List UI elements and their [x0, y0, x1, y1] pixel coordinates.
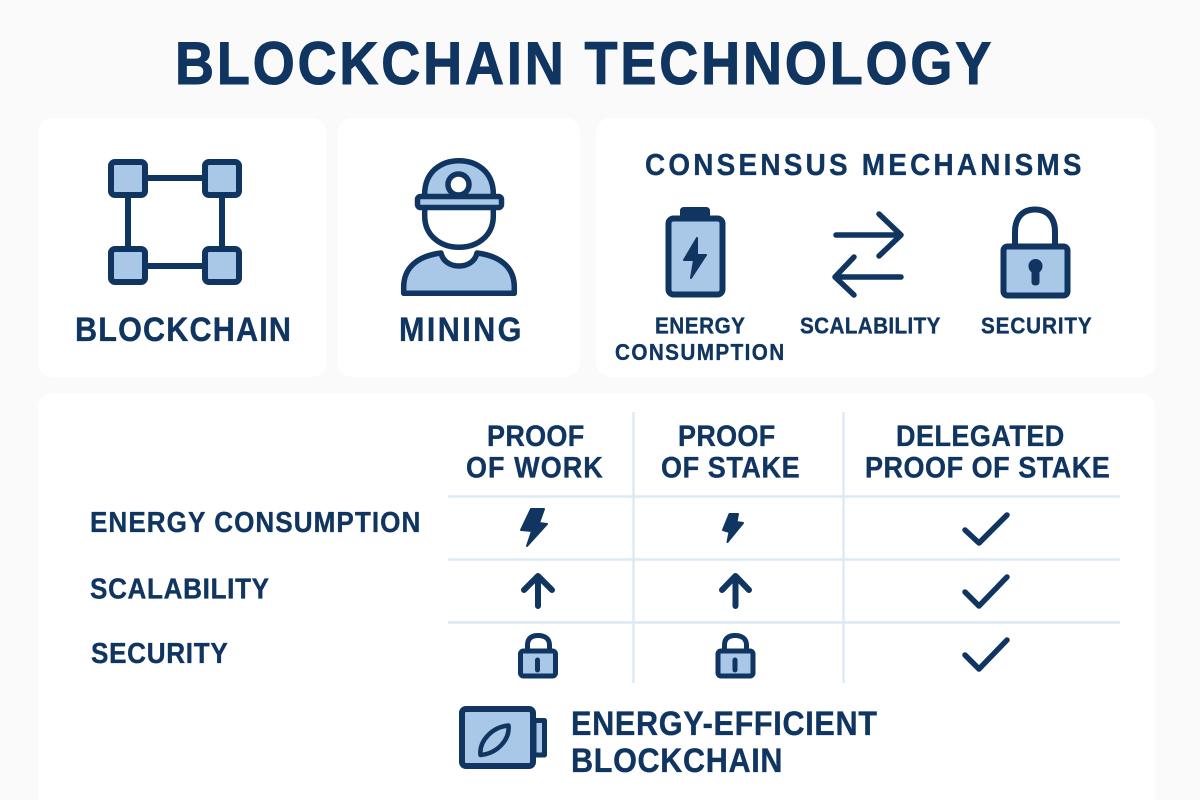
- label: mining: MINING: [399, 311, 521, 348]
- icon: connected blocks: [111, 162, 239, 282]
- heading: consensus mechanisms: CONSENSUS MECHANISMS: [645, 148, 1082, 182]
- icon: small bolt: [723, 514, 743, 542]
- column header: delegated proof of stake: [865, 420, 1110, 485]
- icon: leaf battery: [462, 709, 544, 766]
- column header: proof of stake: OF STAKE: [661, 451, 800, 485]
- column header: proof of work: PROOF: [487, 420, 584, 453]
- icon: up arrow pow: [524, 576, 552, 606]
- title: BLOCKCHAIN TECHNOLOGY: [175, 30, 991, 98]
- icon: battery: [668, 208, 722, 294]
- icon: miner: [404, 161, 514, 293]
- row label: scalability: SCALABILITY: [90, 572, 269, 605]
- callout: energy-efficient blockchain: BLOCKCHAIN: [571, 742, 783, 779]
- icon: large bolt: [521, 509, 547, 546]
- column header: delegated proof of stake: DELEGATED: [896, 420, 1064, 453]
- label: scalability: SCALABILITY: [800, 312, 941, 339]
- panel: comparison table: [38, 393, 1155, 800]
- icon: padlock: [1004, 210, 1068, 296]
- callout: energy-efficient blockchain: [571, 705, 877, 779]
- column header: proof of stake: [661, 420, 800, 485]
- panel: mining: [338, 118, 580, 377]
- icon: lock pow: [520, 636, 556, 676]
- callout: energy-efficient blockchain: ENERGY-EFFICIENT: [571, 705, 877, 742]
- label: energy consumption: CONSUMPTION: [615, 339, 784, 365]
- column header: proof of work: [466, 420, 603, 485]
- label: blockchain: BLOCKCHAIN: [75, 311, 291, 348]
- label: energy consumption: ENERGY: [655, 312, 745, 339]
- icon: check row 3: [965, 640, 1007, 669]
- column header: proof of stake: PROOF: [678, 420, 775, 453]
- row label: security: SECURITY: [91, 637, 228, 669]
- panel: blockchain: [38, 118, 326, 377]
- panel: consensus mechanisms: [596, 118, 1155, 377]
- row label: energy consumption: ENERGY CONSUMPTION: [90, 506, 420, 538]
- label: energy consumption: [615, 312, 784, 365]
- icon: check row 2: [965, 577, 1007, 606]
- column header: delegated proof of stake: PROOF OF STAKE: [865, 451, 1110, 485]
- icon: exchange arrows: [835, 214, 901, 295]
- icon: up arrow pos: [722, 576, 749, 606]
- column header: proof of work: OF WORK: [466, 451, 603, 485]
- label: security: SECURITY: [981, 312, 1092, 339]
- icon: check row 1: [965, 515, 1007, 543]
- icon: lock pos: [718, 636, 753, 676]
